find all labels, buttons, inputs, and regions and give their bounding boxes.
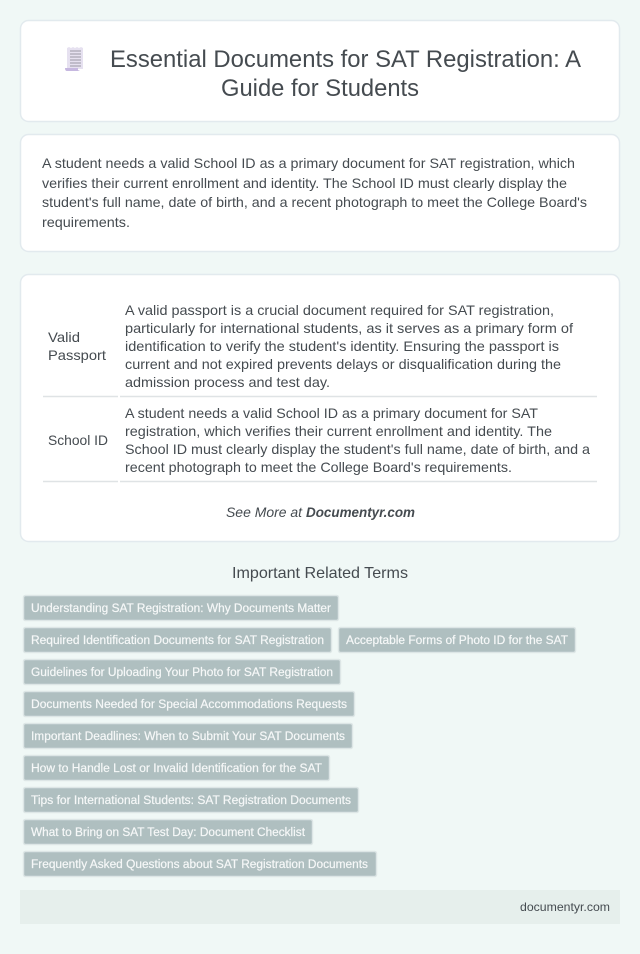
tag: Required Identification Documents for SAT Registration	[31, 633, 324, 647]
table row: valid passport	[48, 302, 573, 390]
link: see more	[226, 504, 415, 520]
link: see more: See More at	[226, 504, 303, 520]
text block: introduction: requirements.	[42, 214, 130, 230]
row text: valid passport	[125, 302, 573, 390]
tag	[24, 852, 376, 876]
tag	[24, 788, 358, 812]
panel: documents table	[20, 274, 620, 542]
row label: valid passport	[48, 329, 106, 363]
tag	[24, 628, 332, 652]
tag: Understanding SAT Registration: Why Documents Matter	[31, 601, 331, 615]
row text: school id	[125, 405, 590, 475]
title	[110, 46, 581, 102]
row text: school id: recent photograph to meet the College Board's requirements.	[125, 459, 512, 475]
tag: Acceptable Forms of Photo ID for the SAT	[346, 633, 569, 647]
footer: documentyr.com	[520, 900, 610, 914]
tag	[338, 628, 576, 652]
related terms tags	[24, 596, 576, 876]
row label: school id: School ID	[48, 432, 108, 448]
tag: Tips for International Students: SAT Registration Documents	[31, 793, 351, 807]
tag	[24, 660, 340, 684]
text block: introduction: A student needs a valid School ID as a primary document for SAT registration, which	[42, 155, 575, 171]
panel: introduction	[20, 134, 620, 252]
text block: introduction: student's full name, date of birth, and a recent photograph to meet the College Board's	[42, 194, 587, 210]
link: see more: Documentyr.com	[306, 504, 415, 520]
row text: school id: registration, which verifies their current enrollment and identity. The	[125, 423, 552, 439]
tag	[24, 596, 338, 620]
tag: Important Deadlines: When to Submit Your SAT Documents	[31, 729, 345, 743]
tag	[24, 692, 354, 716]
tag	[24, 724, 352, 748]
row text: school id: A student needs a valid School ID as a primary document for SAT	[125, 405, 538, 421]
heading: related terms: Important Related Terms	[232, 565, 408, 582]
tag: What to Bring on SAT Test Day: Document Checklist	[31, 825, 306, 839]
title: Essential Documents for SAT Registration: A	[110, 46, 581, 73]
text block: introduction	[42, 155, 587, 230]
tag: Frequently Asked Questions about SAT Registration Documents	[31, 857, 368, 871]
row label: valid passport: Valid	[48, 329, 80, 345]
icon: document scroll	[65, 47, 83, 71]
tag: Documents Needed for Special Accommodations Requests	[31, 697, 347, 711]
table row: school id	[48, 405, 590, 475]
row label: valid passport: Passport	[48, 347, 106, 363]
footer	[20, 890, 620, 924]
row text: valid passport: admission process and test day.	[125, 374, 330, 390]
text block: introduction: verifies their current enrollment and identity. The School ID must clearly display the	[42, 175, 567, 191]
row text: valid passport: A valid passport is a crucial document required for SAT registration,	[125, 302, 554, 318]
row text: school id: School ID must clearly display the student's full name, date of birth, and a	[125, 441, 590, 457]
title: Guide for Students	[221, 75, 419, 102]
row text: valid passport: current and not expired prevents delays or disqualification during the	[125, 356, 561, 372]
tag: Guidelines for Uploading Your Photo for SAT Registration	[31, 665, 333, 679]
tag	[24, 756, 330, 780]
tag	[24, 820, 312, 844]
tag: How to Handle Lost or Invalid Identification for the SAT	[31, 761, 323, 775]
panel: title card	[20, 20, 620, 122]
row text: valid passport: identification to verify the student's identity. Ensuring the passport is	[125, 338, 559, 354]
row text: valid passport: particularly for international students, as it serves as a primary form of	[125, 320, 573, 336]
